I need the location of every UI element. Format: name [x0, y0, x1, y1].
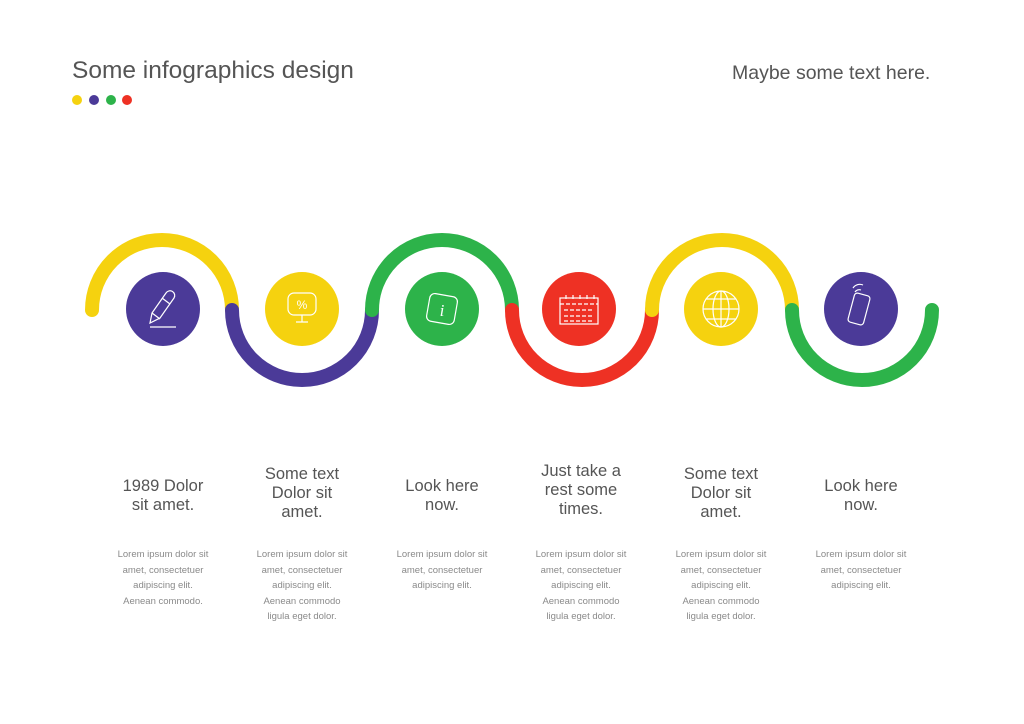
text: Aenean commodo	[542, 596, 620, 606]
text: Aenean commodo	[682, 596, 760, 606]
text: amet, consectetuer	[681, 564, 761, 576]
text: sit amet.	[132, 496, 194, 514]
color dots	[72, 95, 132, 105]
icon: pencil	[126, 272, 200, 346]
text: adipiscing elit.	[272, 580, 332, 591]
text: 1989 Dolor	[123, 477, 203, 495]
icon: calendar	[542, 272, 616, 346]
text: Just take a	[541, 462, 621, 480]
text: amet, consectetuer	[262, 564, 342, 576]
text: ligula eget dolor.	[267, 611, 337, 622]
text: adipiscing elit.	[831, 580, 891, 591]
text: ligula eget dolor.	[546, 611, 616, 622]
text: amet.	[281, 503, 323, 521]
text: adipiscing elit.	[551, 580, 611, 591]
text: Some text	[265, 465, 339, 483]
text: adipiscing elit.	[133, 580, 193, 591]
text: Dolor sit	[691, 484, 751, 502]
text: Lorem ipsum dolor sit	[397, 549, 487, 560]
text: Some text	[684, 465, 758, 483]
step 3 text	[397, 477, 488, 591]
text: amet, consectetuer	[541, 564, 621, 576]
icon: info	[405, 272, 479, 346]
icon: globe	[684, 272, 758, 346]
text: Lorem ipsum dolor sit	[816, 549, 906, 560]
text: adipiscing elit.	[691, 580, 751, 591]
text: Lorem ipsum dolor sit	[257, 549, 347, 560]
text: Dolor sit	[272, 484, 332, 502]
subtitle: Maybe some text here.	[732, 62, 930, 84]
step 6 text	[816, 477, 906, 591]
step 1 text	[118, 477, 208, 606]
text: now.	[425, 496, 459, 514]
icon: info: i	[440, 301, 445, 320]
text: amet, consectetuer	[821, 564, 901, 576]
text: Lorem ipsum dolor sit	[536, 549, 626, 560]
text: Look here	[824, 477, 898, 495]
text: Lorem ipsum dolor sit	[676, 549, 766, 560]
text: Lorem ipsum dolor sit	[118, 549, 208, 560]
title: Some infographics design	[72, 57, 354, 84]
icon: phone	[824, 272, 898, 346]
icon: percent sign	[265, 272, 339, 346]
text: adipiscing elit.	[412, 580, 472, 591]
text: Aenean commodo	[263, 596, 341, 606]
text: rest some	[545, 481, 617, 499]
text: times.	[559, 500, 603, 518]
icon: percent sign: %	[297, 298, 308, 312]
text: now.	[844, 496, 878, 514]
step 4 text	[536, 462, 626, 622]
text: Aenean commodo.	[123, 596, 203, 606]
step 5 text	[676, 465, 766, 622]
text: amet, consectetuer	[123, 564, 203, 576]
text: amet, consectetuer	[402, 564, 482, 576]
text: amet.	[700, 503, 742, 521]
text: Look here	[405, 477, 479, 495]
text: ligula eget dolor.	[686, 611, 756, 622]
step 2 text	[257, 465, 348, 622]
